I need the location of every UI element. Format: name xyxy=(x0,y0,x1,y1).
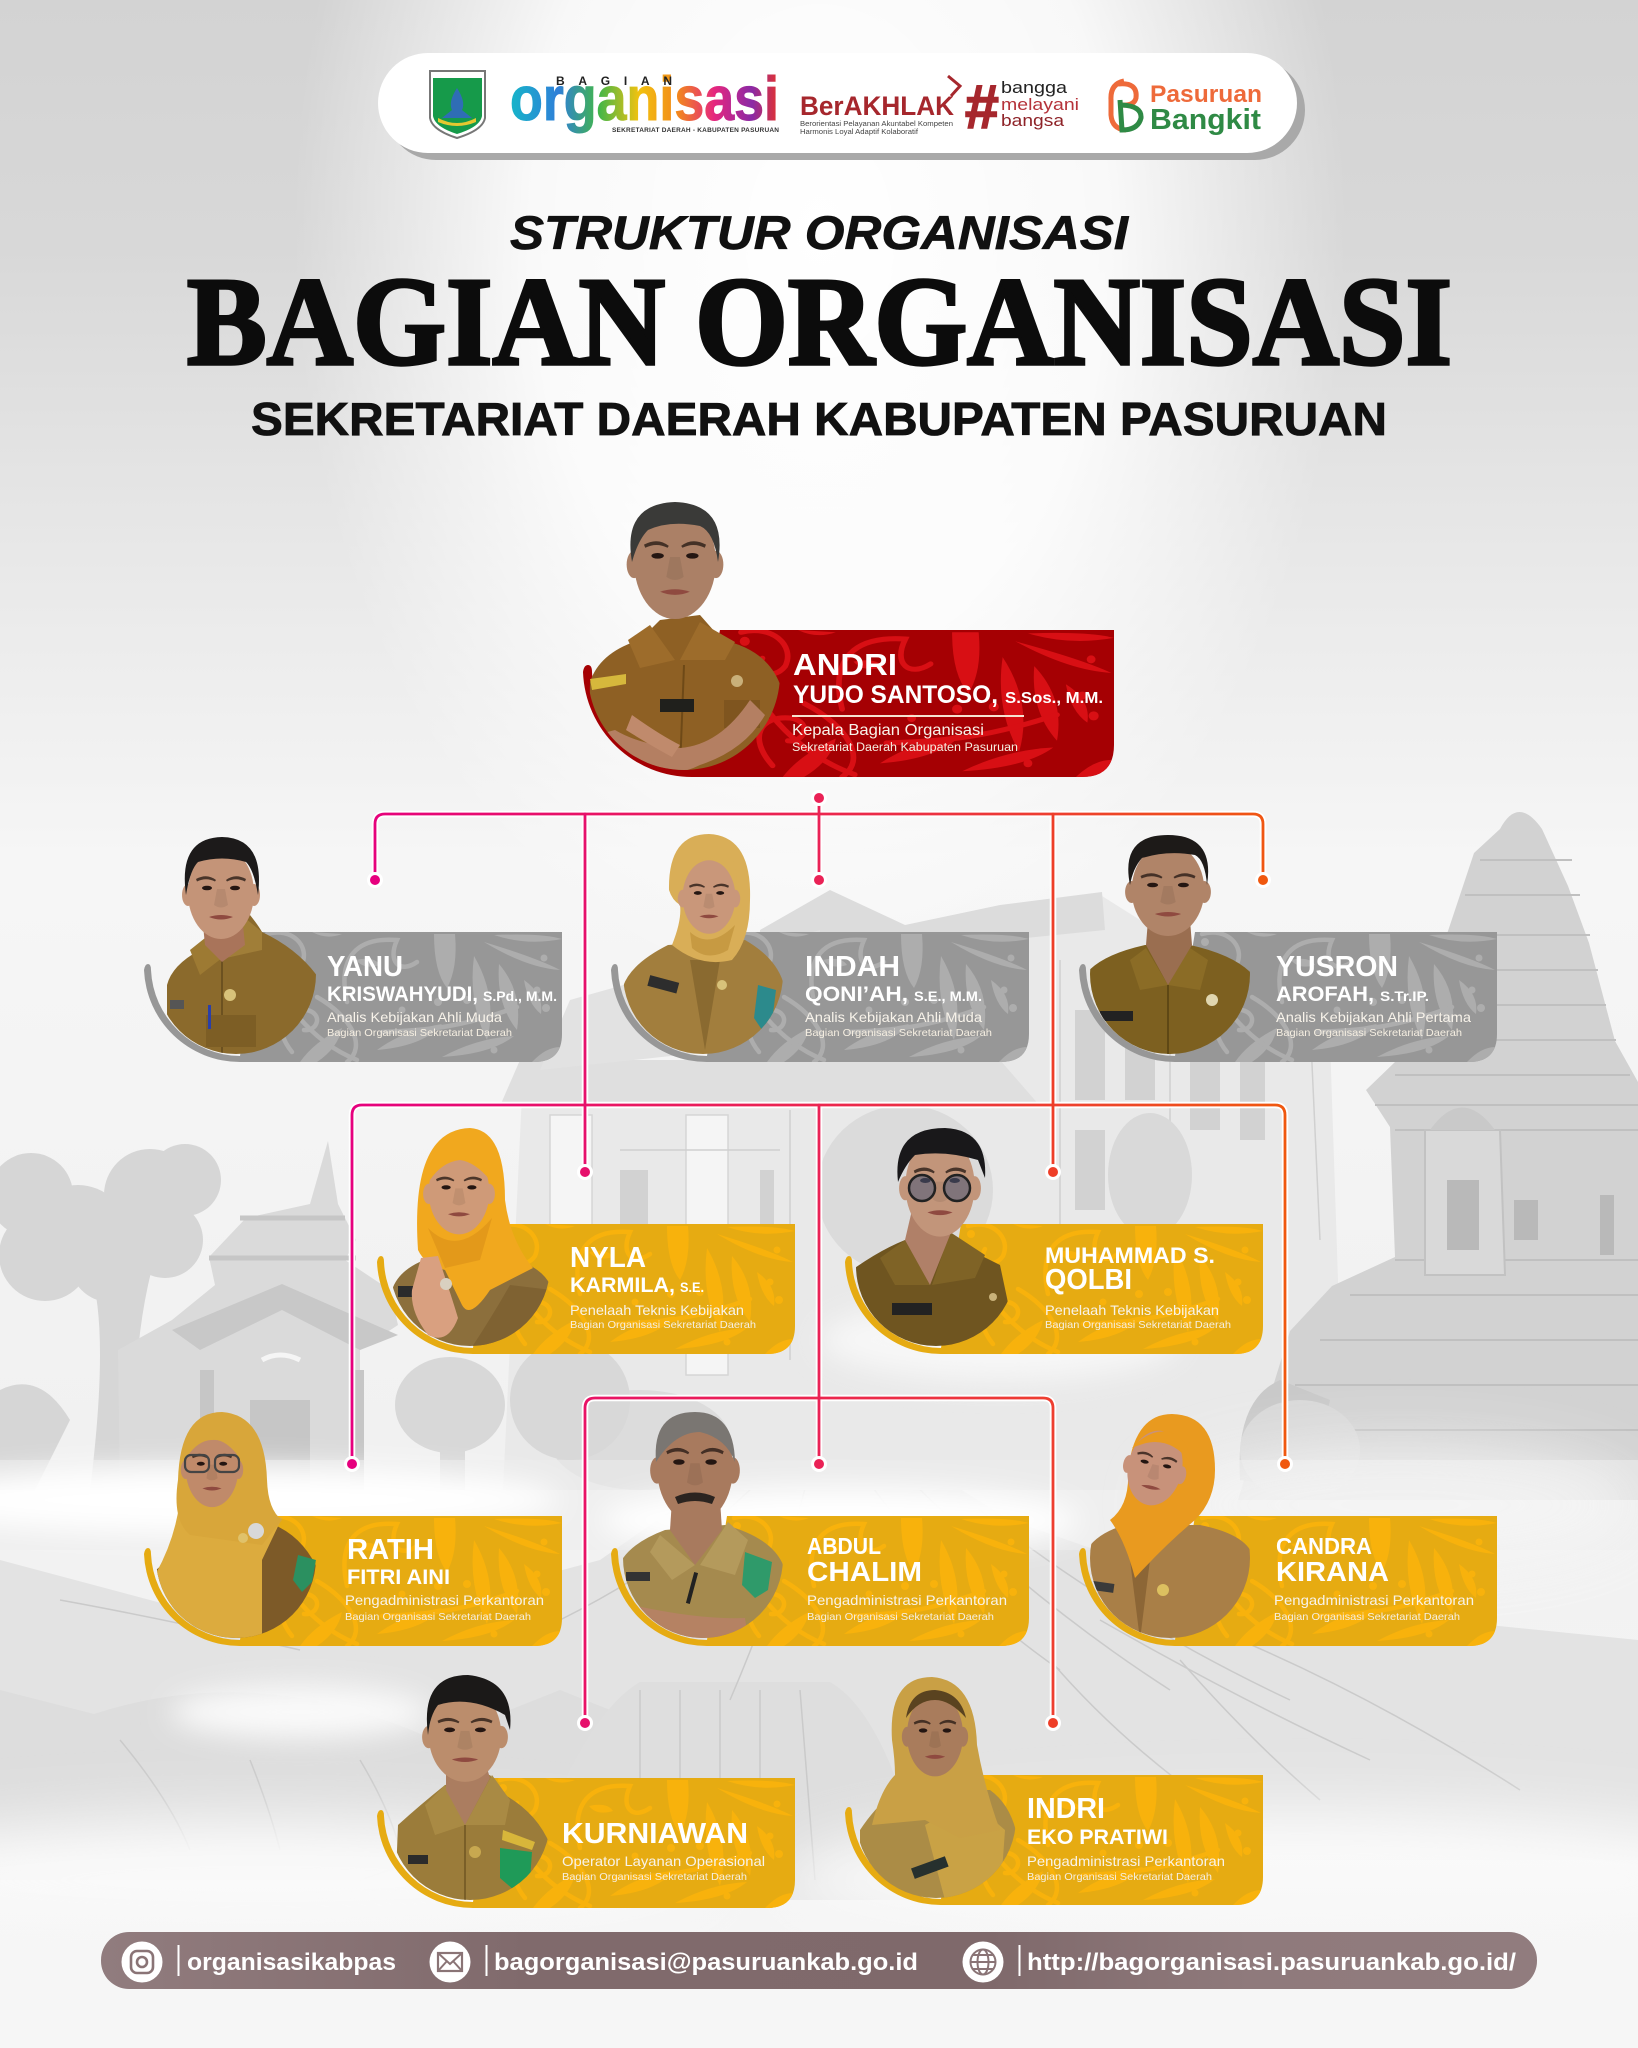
panel: Indri Eko Pratiwi (yellow) xyxy=(845,1677,1263,1905)
logo: Bagian Organisasi: SEKRETARIAT DAERAH - KABUPATEN PASURUAN xyxy=(612,127,779,134)
portrait: Ratih xyxy=(155,1412,318,1640)
logo: Pasuruan Bangkit: Pasuruan xyxy=(1150,81,1262,108)
name and position text: EKO PRATIWI xyxy=(1027,1826,1168,1849)
name and position text: Penelaah Teknis Kebijakan xyxy=(1045,1302,1219,1318)
logo: Pasuruan Bangkit xyxy=(1111,81,1262,136)
name and position text: CHALIM xyxy=(807,1556,922,1587)
panel: Candra Kirana (yellow) xyxy=(1079,1414,1497,1646)
government building xyxy=(500,890,1345,1490)
ground mist xyxy=(0,1300,1638,2048)
name and position text: Sekretariat Daerah Kabupaten Pasuruan xyxy=(792,742,1018,754)
name and position text: KRISWAHYUDI, xyxy=(327,983,478,1006)
name and position text: NYLA xyxy=(570,1242,646,1274)
portrait: Andri xyxy=(588,502,782,780)
icon: envelope xyxy=(430,1942,470,1982)
logo: Kabupaten Pasuruan shield xyxy=(430,71,485,138)
name and position text: S.E. xyxy=(680,1280,704,1295)
contact: website: http://bagorganisasi.pasuruankab.go.id/ xyxy=(1027,1949,1516,1976)
logo: BerAKHLAK xyxy=(800,76,960,136)
name and position text: Bagian Organisasi Sekretariat Daerah xyxy=(1045,1319,1231,1331)
logo: BerAKHLAK: BerAKHLAK xyxy=(800,91,954,121)
name and position text: Bagian Organisasi Sekretariat Daerah xyxy=(562,1871,747,1883)
footer contact bar xyxy=(101,1932,1537,1989)
name and position text: Penelaah Teknis Kebijakan xyxy=(570,1302,744,1318)
name and position text: CANDRA xyxy=(1276,1533,1372,1559)
name and position text: QONI’AH, xyxy=(805,983,908,1006)
title block xyxy=(187,206,1452,445)
name and position text: RATIH xyxy=(347,1534,434,1566)
icon: globe xyxy=(962,1942,1004,1982)
name and position text: KIRANA xyxy=(1276,1556,1389,1587)
logo: BerAKHLAK: Harmonis Loyal Adaptif Kolaboratif xyxy=(800,129,918,136)
name and position text: KURNIAWAN xyxy=(562,1818,748,1850)
portrait: Candra xyxy=(1082,1414,1254,1640)
name and position text: Analis Kebijakan Ahli Muda xyxy=(327,1009,502,1025)
portrait: Indah xyxy=(620,834,785,1060)
name and position text: INDRI xyxy=(1027,1793,1105,1825)
title block: STRUKTUR ORGANISASI xyxy=(510,206,1129,259)
title block: SEKRETARIAT DAERAH KABUPATEN PASURUAN xyxy=(251,393,1387,445)
name and position text xyxy=(1045,1243,1231,1331)
portrait: Abdul xyxy=(623,1412,783,1638)
name and position text: Bagian Organisasi Sekretariat Daerah xyxy=(327,1027,512,1039)
name and position text xyxy=(327,951,557,1039)
panel: Abdul Chalim (yellow) xyxy=(611,1412,1029,1650)
panel: Kurniawan (yellow) xyxy=(377,1675,795,1908)
name and position text: INDAH xyxy=(805,951,900,983)
portrait: Muhammad Qolbi xyxy=(856,1128,1008,1346)
mosque xyxy=(118,1141,398,1490)
logo: bangga melayani bangsa xyxy=(964,73,1079,142)
name and position text: YANU xyxy=(327,951,403,983)
name and position text: Bagian Organisasi Sekretariat Daerah xyxy=(570,1319,756,1331)
panel: Andri Yudo Santoso (red) xyxy=(583,502,1114,780)
portrait: Nyla xyxy=(392,1128,552,1350)
name and position text: ABDUL xyxy=(807,1533,881,1559)
name and position text: QOLBI xyxy=(1045,1264,1132,1296)
name and position text: S.Tr.IP. xyxy=(1380,989,1429,1004)
background illustration: temple, government building, mosque, tree and volcano xyxy=(0,812,1638,2048)
name and position text: AROFAH, xyxy=(1276,983,1374,1006)
name and position text: Bagian Organisasi Sekretariat Daerah xyxy=(807,1611,994,1623)
volcano and slopes xyxy=(0,1404,1638,1900)
connector lines xyxy=(344,790,1293,1731)
panel: Muhammad S. Qolbi (yellow) xyxy=(845,1128,1263,1354)
logo bar xyxy=(378,53,1305,160)
name and position text: KARMILA, xyxy=(570,1274,675,1297)
name and position text: S.E., M.M. xyxy=(914,989,982,1004)
name and position text: MUHAMMAD S. xyxy=(1045,1243,1215,1268)
panel: Ratih Fitri Aini (yellow) xyxy=(144,1412,562,1646)
name and position text: Bagian Organisasi Sekretariat Daerah xyxy=(805,1027,992,1039)
title block: BAGIAN ORGANISASI xyxy=(187,253,1452,392)
name and position text xyxy=(570,1242,756,1331)
left tree xyxy=(0,1144,221,1490)
name and position text xyxy=(1276,951,1471,1039)
logo: Bagian Organisasi: organisasi xyxy=(510,65,779,134)
logo: bangga melayani bangsa: bangga xyxy=(1001,78,1068,97)
name and position text: FITRI AINI xyxy=(347,1566,450,1589)
name and position text xyxy=(1274,1533,1474,1623)
panel: Yusron Arofah (grey) xyxy=(1079,835,1497,1062)
panel: Indah Qoni'ah (grey) xyxy=(611,834,1029,1062)
name and position text xyxy=(562,1818,765,1883)
name and position text: YUDO SANTOSO, xyxy=(793,681,998,709)
logo: BerAKHLAK: Berorientasi Pelayanan Akuntabel Kompeten xyxy=(800,121,953,128)
name and position text xyxy=(345,1534,544,1623)
name and position text: Analis Kebijakan Ahli Muda xyxy=(805,1009,982,1025)
name and position text: Bagian Organisasi Sekretariat Daerah xyxy=(1276,1027,1462,1039)
name and position text xyxy=(805,951,992,1039)
logo: bangga melayani bangsa: bangsa xyxy=(1001,111,1065,130)
contact: email: bagorganisasi@pasuruankab.go.id xyxy=(494,1949,918,1976)
name and position text: Bagian Organisasi Sekretariat Daerah xyxy=(1274,1611,1460,1623)
name and position text xyxy=(1027,1793,1225,1883)
logo: Pasuruan Bangkit: Bangkit xyxy=(1150,104,1261,136)
icon: instagram xyxy=(122,1942,162,1982)
logo: Bagian Organisasi: BAGIAN xyxy=(556,74,672,88)
name and position text: Analis Kebijakan Ahli Pertama xyxy=(1276,1009,1471,1025)
portrait: Indri xyxy=(860,1677,1020,1900)
portrait: Kurniawan xyxy=(395,1675,552,1900)
name and position text: S.Sos., M.M. xyxy=(1005,690,1103,707)
name and position text: ANDRI xyxy=(793,647,897,682)
logo: bangga melayani bangsa: melayani xyxy=(1001,95,1079,114)
portrait: Yusron xyxy=(1085,835,1253,1060)
right temple xyxy=(1238,812,1638,1500)
name and position text xyxy=(792,647,1103,754)
name and position text: YUSRON xyxy=(1276,951,1398,983)
name and position text: Kepala Bagian Organisasi xyxy=(792,722,984,739)
name and position text: Operator Layanan Operasional xyxy=(562,1853,765,1869)
contact: instagram handle: organisasikabpas xyxy=(187,1949,396,1976)
name and position text: Bagian Organisasi Sekretariat Daerah xyxy=(1027,1871,1212,1883)
name and position text: Bagian Organisasi Sekretariat Daerah xyxy=(345,1611,531,1623)
name and position text: Pengadministrasi Perkantoran xyxy=(1274,1592,1474,1608)
name and position text: Pengadministrasi Perkantoran xyxy=(1027,1853,1225,1869)
name and position text: S.Pd., M.M. xyxy=(483,989,557,1004)
panel: Yanu Kriswahyudi (grey) xyxy=(144,837,562,1062)
panel: Nyla Karmila (yellow) xyxy=(377,1128,795,1354)
logo: bangga melayani bangsa: # xyxy=(964,73,999,142)
portrait: Yanu xyxy=(167,837,320,1060)
name and position text: Pengadministrasi Perkantoran xyxy=(807,1592,1007,1608)
name and position text: Pengadministrasi Perkantoran xyxy=(345,1592,544,1608)
palm clusters and trees xyxy=(395,1340,1360,1500)
name and position text xyxy=(807,1533,1007,1623)
